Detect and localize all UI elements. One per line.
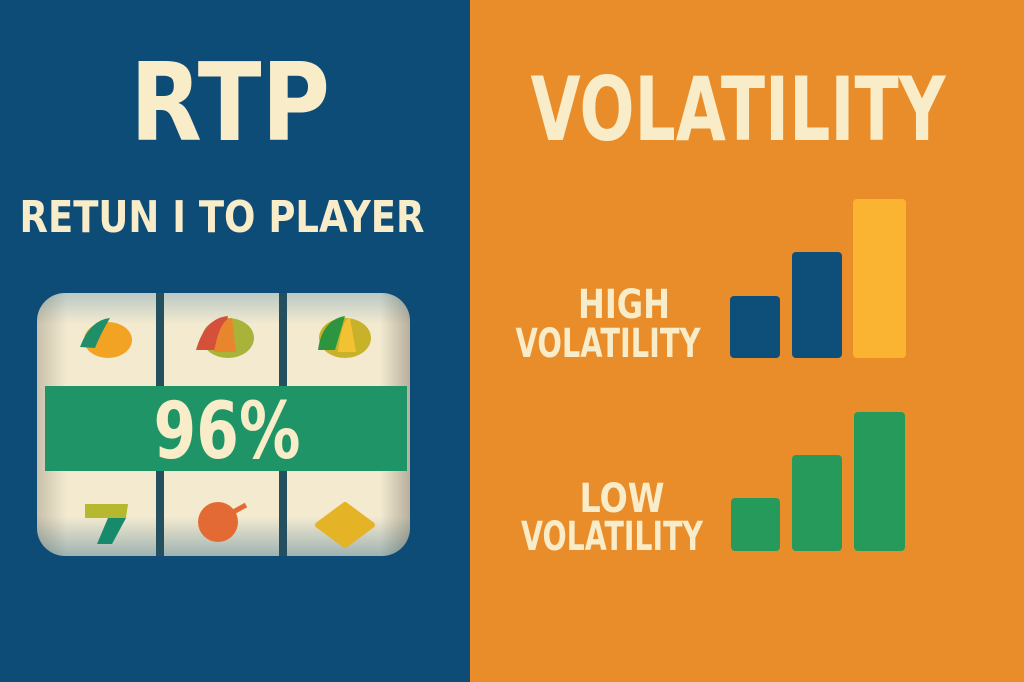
icon: orange fruit	[198, 502, 246, 542]
label: low volatility: LOW	[580, 476, 664, 522]
icon: fruit 1	[80, 318, 132, 358]
label: high volatility: HIGH	[578, 282, 670, 328]
label: low volatility: VOLATILITY	[521, 514, 704, 560]
label: high volatility: VOLATILITY	[516, 321, 701, 367]
icon: fruit 2	[196, 316, 254, 358]
label: low volatility	[521, 476, 704, 560]
icon: seven	[85, 504, 128, 544]
panel: RTP background	[0, 0, 470, 682]
icon: fruit 3	[318, 316, 371, 358]
panel: volatility background	[470, 0, 1024, 682]
icon: diamond	[318, 505, 372, 545]
chart: high volatility bars	[730, 199, 906, 358]
percentage band	[45, 386, 407, 477]
slot machine reels	[37, 293, 410, 556]
percentage band: 96%	[154, 387, 300, 477]
title: RTP: RTP	[130, 41, 330, 166]
chart: low volatility bars	[731, 412, 905, 551]
label: high volatility	[516, 282, 701, 367]
subtitle: return to player: RETUN I TO PLAYER	[20, 192, 424, 243]
